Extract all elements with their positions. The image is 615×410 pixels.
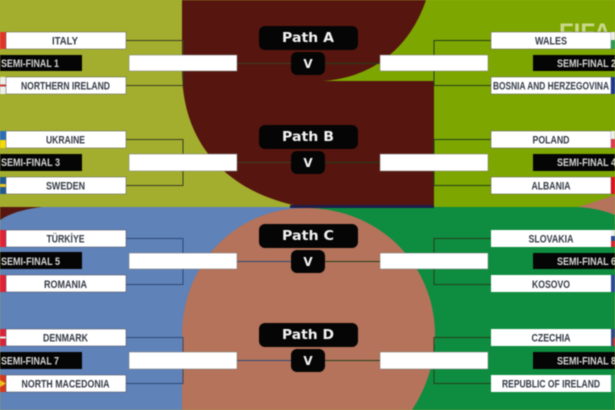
winner box right C2 xyxy=(380,253,488,269)
team: Albania xyxy=(491,177,611,194)
bracket connectors right xyxy=(325,40,491,384)
heading: Path B xyxy=(259,125,358,149)
team: Northern Ireland xyxy=(6,77,126,94)
versus pill C: V xyxy=(303,255,313,269)
team: Türkiye xyxy=(6,230,126,247)
panel: Path D xyxy=(0,323,615,392)
winner box right B2 xyxy=(380,154,488,171)
flag: Slovakia xyxy=(611,230,615,247)
flag: Ukraine xyxy=(0,131,6,148)
background: navy strip xyxy=(290,205,434,208)
winner box left D1 xyxy=(129,352,237,369)
winner box right A2 xyxy=(380,55,488,71)
team: Wales xyxy=(491,32,611,49)
team: Romania: ROMANIA xyxy=(44,279,87,291)
background: dark corner xyxy=(0,207,42,220)
flag: Northern Ireland xyxy=(0,77,6,94)
versus pill A: V xyxy=(303,57,313,71)
team: Italy xyxy=(6,32,126,49)
background: green quadrant xyxy=(305,207,615,410)
team: Republic of Ireland xyxy=(491,375,611,392)
heading: Path C: Path C xyxy=(282,229,334,244)
team: Denmark: DENMARK xyxy=(43,332,88,344)
team: Northern Ireland: NORTHERN IRELAND xyxy=(21,80,110,92)
flag: Ireland xyxy=(611,375,615,392)
semi-final 8 xyxy=(533,352,615,369)
heading: Path A: Path A xyxy=(282,31,334,46)
semi-final 3 xyxy=(0,154,82,171)
winner box left C1 xyxy=(129,253,237,269)
winner box left B1 xyxy=(129,154,237,171)
team: Poland xyxy=(491,131,611,148)
team: North Macedonia: NORTH MACEDONIA xyxy=(22,378,110,390)
semi-final 5: SEMI-FINAL 5 xyxy=(1,256,60,268)
team: Albania: ALBANIA xyxy=(532,180,571,192)
semi-final 1 xyxy=(0,55,82,71)
heading: Path A xyxy=(259,26,358,50)
team: Slovakia: SLOVAKIA xyxy=(528,234,574,246)
team: Ukraine: UKRAINE xyxy=(46,134,85,146)
team: Ukraine xyxy=(6,131,126,148)
semi-final 3: SEMI-FINAL 3 xyxy=(1,157,60,169)
winner box right D2 xyxy=(380,352,488,369)
team: Kosovo xyxy=(491,275,611,292)
team: North Macedonia xyxy=(6,375,126,392)
versus pill B xyxy=(291,151,325,174)
versus pill A xyxy=(291,52,325,75)
team: Poland: POLAND xyxy=(532,134,570,146)
flag: Türkiye xyxy=(0,230,6,247)
team: Sweden: SWEDEN xyxy=(46,180,85,192)
versus pill C xyxy=(291,250,325,273)
versus pill B: V xyxy=(303,156,313,170)
panel: Path C xyxy=(0,224,615,292)
semi-final 2 xyxy=(533,55,615,71)
heading: Path B: Path B xyxy=(282,130,334,145)
versus pill D xyxy=(291,349,325,372)
background: olive quadrant xyxy=(0,0,310,207)
flag: Czechia xyxy=(611,329,615,346)
versus pill D: V xyxy=(303,354,313,368)
semi-final 6 xyxy=(533,253,615,269)
heading: Path D: Path D xyxy=(282,328,334,343)
flag: Kosovo xyxy=(611,275,615,292)
flag: Wales xyxy=(611,32,615,49)
background: terracotta shape xyxy=(182,208,435,410)
team: Italy: ITALY xyxy=(52,36,79,48)
semi-final 7: SEMI-FINAL 7 xyxy=(1,356,59,368)
semi-final 7 xyxy=(0,352,82,369)
team: Wales: WALES xyxy=(535,36,567,48)
flag: Albania xyxy=(611,177,615,194)
heading: Path D xyxy=(259,323,358,347)
team: Kosovo: KOSOVO xyxy=(532,279,570,291)
flag: Bosnia xyxy=(611,77,615,94)
semi-final 5 xyxy=(0,252,82,269)
team: Czechia xyxy=(491,329,611,346)
winner box left A1 xyxy=(129,55,237,71)
flag: Poland xyxy=(611,131,615,148)
semi-final 1: SEMI-FINAL 1 xyxy=(1,58,59,70)
background: lime quadrant xyxy=(305,0,615,207)
flag: Sweden xyxy=(0,177,6,194)
panel: Path A xyxy=(0,26,615,94)
team: Slovakia xyxy=(491,230,611,247)
bracket connectors left xyxy=(126,40,291,384)
background: dark brown shape xyxy=(182,0,434,205)
background: top-right terracotta corner xyxy=(578,195,615,215)
flag: Romania xyxy=(0,275,6,292)
team: Sweden xyxy=(6,177,126,194)
team: Romania xyxy=(6,275,126,292)
semi-final 4 xyxy=(533,154,615,171)
team: Türkiye: TÜRKİYE xyxy=(46,232,84,246)
background: blue quadrant xyxy=(0,207,320,410)
team: Denmark xyxy=(6,329,126,346)
flag: North Macedonia xyxy=(0,375,6,392)
team: Bosnia and Herzegovina xyxy=(491,77,611,94)
watermark: FIFA: FIFA xyxy=(559,19,611,46)
flag: Italy xyxy=(0,32,6,49)
team: Czechia: CZECHIA xyxy=(532,332,571,344)
heading: Path C xyxy=(259,224,358,248)
panel: Path B xyxy=(0,125,615,194)
flag: Denmark xyxy=(0,329,6,346)
